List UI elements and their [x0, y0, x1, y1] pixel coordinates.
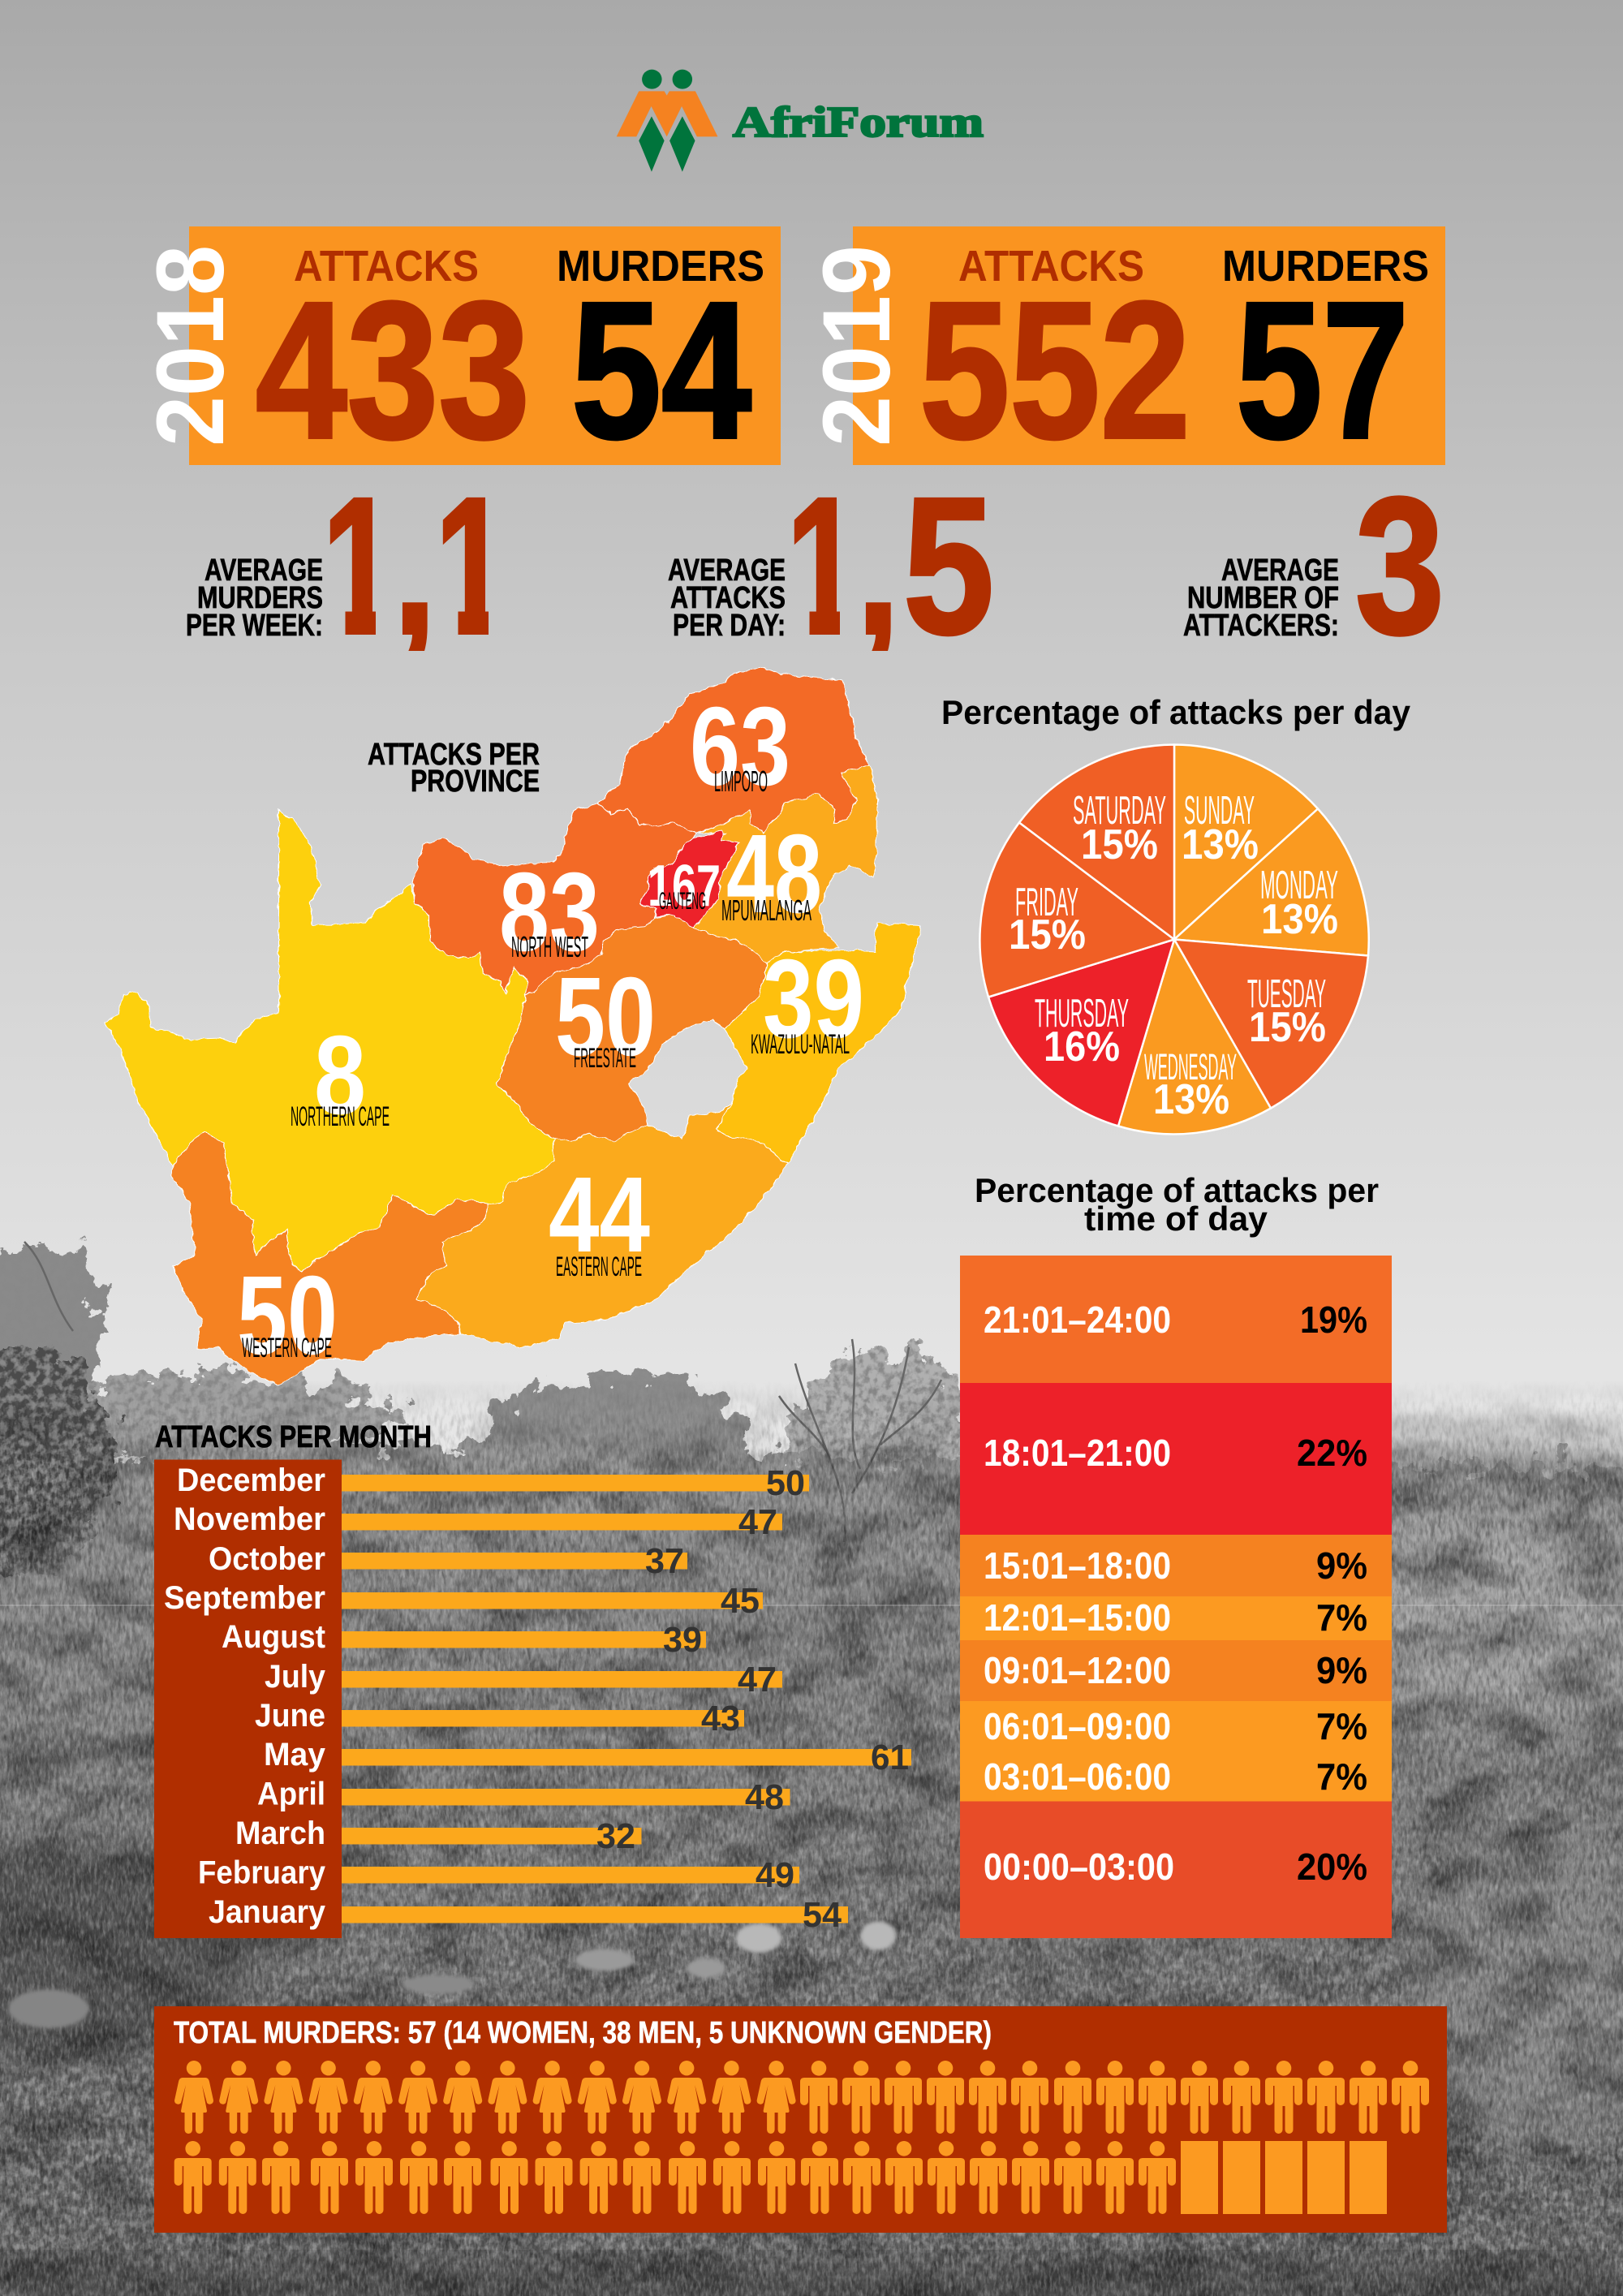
row 12:01–15:00	[960, 1596, 1392, 1640]
month labels: July	[265, 1659, 326, 1695]
month labels: February	[198, 1855, 326, 1891]
stat label: NUMBER OF	[1187, 581, 1339, 615]
value: Northern Cape: 8	[314, 1013, 366, 1138]
map heading: PROVINCE	[411, 765, 540, 799]
stat label	[1183, 554, 1339, 643]
pie labels: SUNDAY	[1184, 789, 1255, 833]
month labels: April	[257, 1776, 325, 1811]
value: North West: 83	[499, 850, 600, 975]
pie labels: 13%	[1261, 896, 1338, 943]
map regions	[104, 668, 921, 1385]
bar values	[596, 1463, 909, 1935]
stat value 1,5: 1	[786, 457, 860, 674]
stat label: ATTACKS	[670, 581, 786, 615]
stat: average attacks per day	[668, 497, 992, 651]
icons: 5 unknown gender	[1181, 2141, 1387, 2214]
row 09:01–12:00: 9%	[1316, 1649, 1367, 1691]
map: attacks per province: WESTERN CAPE	[242, 1333, 332, 1363]
heading: attacks 2019: ATTACKS	[958, 242, 1144, 291]
row 21:01–24:00: 21:01–24:00	[984, 1299, 1171, 1341]
pie chart: attacks per day	[979, 745, 1369, 1134]
row 06:01–09:00 and 03:01–06:00	[960, 1701, 1392, 1802]
region: Free State	[497, 915, 768, 1142]
bar values: 45	[721, 1581, 760, 1621]
heading: percentage of attacks per time of day	[975, 1171, 1379, 1238]
pie chart: attacks per day: MONDAY	[1260, 864, 1338, 907]
bar values: 48	[745, 1777, 784, 1817]
bar values: 47	[738, 1660, 777, 1699]
value: Mpumalanga: 48	[726, 812, 822, 937]
row 06:01–09:00 and 03:01–06:00: 03:01–06:00	[984, 1755, 1171, 1798]
pie labels: FRIDAY	[1015, 881, 1078, 924]
row 00:00–03:00	[960, 1802, 1392, 1938]
logo mark	[617, 70, 717, 172]
number: 57 murders: 57	[1236, 261, 1409, 479]
region: North West	[413, 803, 696, 997]
region: Gauteng	[639, 830, 739, 928]
bars	[342, 1475, 911, 1923]
bar values: 61	[871, 1738, 909, 1777]
pie labels: 15%	[1009, 911, 1086, 958]
stat label: AVERAGE	[1221, 554, 1339, 588]
value: Eastern Cape: 44	[549, 1155, 650, 1274]
stat label	[186, 554, 323, 643]
region: Eastern Cape	[417, 1101, 787, 1347]
month labels	[164, 1462, 326, 1930]
value: Northern Cape	[291, 1013, 390, 1138]
value: Free State: FREESTATE	[574, 1043, 636, 1074]
row 18:01–21:00: 22%	[1297, 1432, 1367, 1474]
row 18:01–21:00: 18:01–21:00	[984, 1432, 1171, 1474]
bar values: 37	[645, 1541, 684, 1581]
pie labels: 13%	[1153, 1076, 1229, 1123]
map: attacks per province: KWAZULU-NATAL	[751, 1029, 850, 1060]
heading: total murders: TOTAL MURDERS: 57 (14 WOMEN, 38 MEN, 5 UNKNOWN GENDER)	[174, 2016, 992, 2050]
value: KwaZulu-Natal: 39	[763, 937, 864, 1062]
month label panel	[154, 1459, 342, 1938]
map heading	[368, 738, 540, 799]
number: 552 attacks: 552	[919, 261, 1190, 479]
value: Limpopo: 63	[690, 684, 790, 809]
stat label: AVERAGE	[204, 554, 323, 588]
bar values: 50	[766, 1463, 805, 1503]
bar values: 49	[756, 1855, 794, 1895]
row 09:01–12:00	[960, 1640, 1392, 1701]
stat: average murders per week	[187, 497, 489, 651]
month labels: December	[177, 1462, 325, 1498]
pie chart: attacks per day: TUESDAY	[1247, 972, 1326, 1016]
value: Free State: 50	[555, 954, 656, 1079]
stat label: MURDERS	[197, 581, 323, 615]
stat label: AVERAGE	[668, 554, 786, 588]
stat: average number of attackers	[1183, 457, 1444, 674]
stat value 1,1: 1	[435, 457, 509, 674]
year label 2018: 2018	[137, 245, 244, 446]
background: landscape photo	[0, 1217, 1623, 2296]
row 21:01–24:00	[960, 1256, 1392, 1383]
value: Western Cape: 50	[237, 1253, 338, 1378]
heading: attacks 2018: ATTACKS	[294, 242, 479, 291]
map: attacks per province: NORTH WEST	[511, 930, 588, 963]
pie labels: 13%	[1182, 821, 1259, 868]
row 00:00–03:00: 00:00–03:00	[984, 1846, 1174, 1888]
icons: 38 men	[174, 2061, 1429, 2214]
value: Gauteng: GAUTENG	[659, 888, 706, 915]
pie labels: 16%	[1044, 1023, 1120, 1070]
map: attacks per province: NORTHERN CAPE	[291, 1101, 390, 1132]
logo wordmark: AfriForum	[733, 99, 984, 146]
region: Mpumalanga	[693, 765, 877, 964]
row 06:01–09:00 and 03:01–06:00: 7%	[1316, 1705, 1367, 1747]
map: attacks per province	[104, 668, 921, 1385]
month labels: January	[209, 1894, 326, 1930]
pie labels: WEDNESDAY	[1144, 1046, 1237, 1088]
pie labels: THURSDAY	[1035, 992, 1129, 1036]
stat label: PER DAY:	[673, 609, 786, 643]
map: attacks per province: EASTERN CAPE	[556, 1251, 642, 1282]
stat value 1,1	[329, 497, 489, 651]
pie labels	[1009, 789, 1338, 1123]
stat label: ATTACKERS:	[1183, 609, 1339, 643]
value: Limpopo: LIMPOPO	[714, 765, 768, 798]
row 06:01–09:00 and 03:01–06:00: 06:01–09:00	[984, 1705, 1171, 1747]
region: KwaZulu-Natal	[717, 924, 921, 1164]
pie slices	[979, 745, 1369, 1134]
pie labels: SATURDAY	[1073, 789, 1166, 833]
stat label	[668, 554, 786, 643]
map: attacks per province: MPUMALANGA	[721, 894, 812, 927]
row 12:01–15:00: 12:01–15:00	[984, 1596, 1171, 1639]
row 15:01–18:00: 9%	[1316, 1544, 1367, 1587]
row 18:01–21:00	[960, 1383, 1392, 1535]
stat value 3: 3	[1355, 457, 1444, 674]
bar values: 43	[701, 1699, 740, 1738]
row 06:01–09:00 and 03:01–06:00: 7%	[1316, 1755, 1367, 1798]
stat value 1,1: ,	[393, 457, 437, 674]
number: 54 murders: 54	[571, 261, 751, 479]
value: Gauteng: 167	[648, 854, 721, 919]
heading: attacks per month: ATTACKS PER MONTH	[155, 1420, 432, 1454]
month labels: October	[209, 1541, 325, 1577]
map heading: ATTACKS PER	[368, 738, 540, 772]
panel: 2019 totals	[803, 226, 1445, 479]
bar values: 54	[803, 1895, 842, 1935]
heading: percentage of attacks per time of day: time of day	[1084, 1200, 1268, 1238]
pie labels: 15%	[1081, 821, 1158, 868]
stat label: PER WEEK:	[186, 609, 323, 643]
table: attacks per time of day	[960, 1256, 1392, 1938]
heading: murders 2018: MURDERS	[557, 242, 764, 291]
region: Western Cape	[172, 1131, 489, 1385]
row 09:01–12:00: 09:01–12:00	[984, 1649, 1171, 1691]
month labels: June	[255, 1698, 325, 1734]
pie labels: 15%	[1249, 1004, 1326, 1051]
region: Limpopo	[598, 668, 870, 834]
region: Northern Cape	[104, 810, 553, 1273]
row 21:01–24:00: 19%	[1300, 1299, 1367, 1341]
icons: 14 women	[174, 2061, 796, 2134]
month labels: November	[174, 1501, 325, 1537]
bar chart: attacks per month	[154, 1459, 911, 1938]
stat value 1,1: 1	[322, 457, 396, 674]
row 15:01–18:00: 15:01–18:00	[984, 1544, 1171, 1587]
panel: 2018 totals	[137, 226, 781, 479]
year label 2019: 2019	[803, 245, 911, 446]
month labels: August	[222, 1619, 325, 1655]
number: 433 attacks: 433	[256, 261, 530, 479]
stat value 1,5: 5	[903, 457, 994, 674]
row 12:01–15:00: 7%	[1316, 1596, 1367, 1639]
heading: murders 2019: MURDERS	[1222, 242, 1429, 291]
month labels: March	[235, 1816, 325, 1851]
heading: percentage of attacks per day: Percentage of attacks per day	[941, 693, 1411, 731]
month labels: September	[164, 1580, 325, 1616]
stat value 1,5	[794, 497, 992, 651]
bar values: 32	[596, 1816, 635, 1856]
bar values: 47	[738, 1502, 777, 1542]
logo: AfriForum	[617, 70, 984, 172]
stat value 1,5: ,	[856, 457, 900, 674]
heading: percentage of attacks per time of day: Percentage of attacks per	[975, 1171, 1379, 1209]
bar values: 39	[663, 1620, 702, 1660]
row 15:01–18:00	[960, 1535, 1392, 1596]
panel: total murders	[154, 2006, 1447, 2233]
month labels: May	[264, 1737, 326, 1773]
row 00:00–03:00: 20%	[1297, 1846, 1367, 1888]
